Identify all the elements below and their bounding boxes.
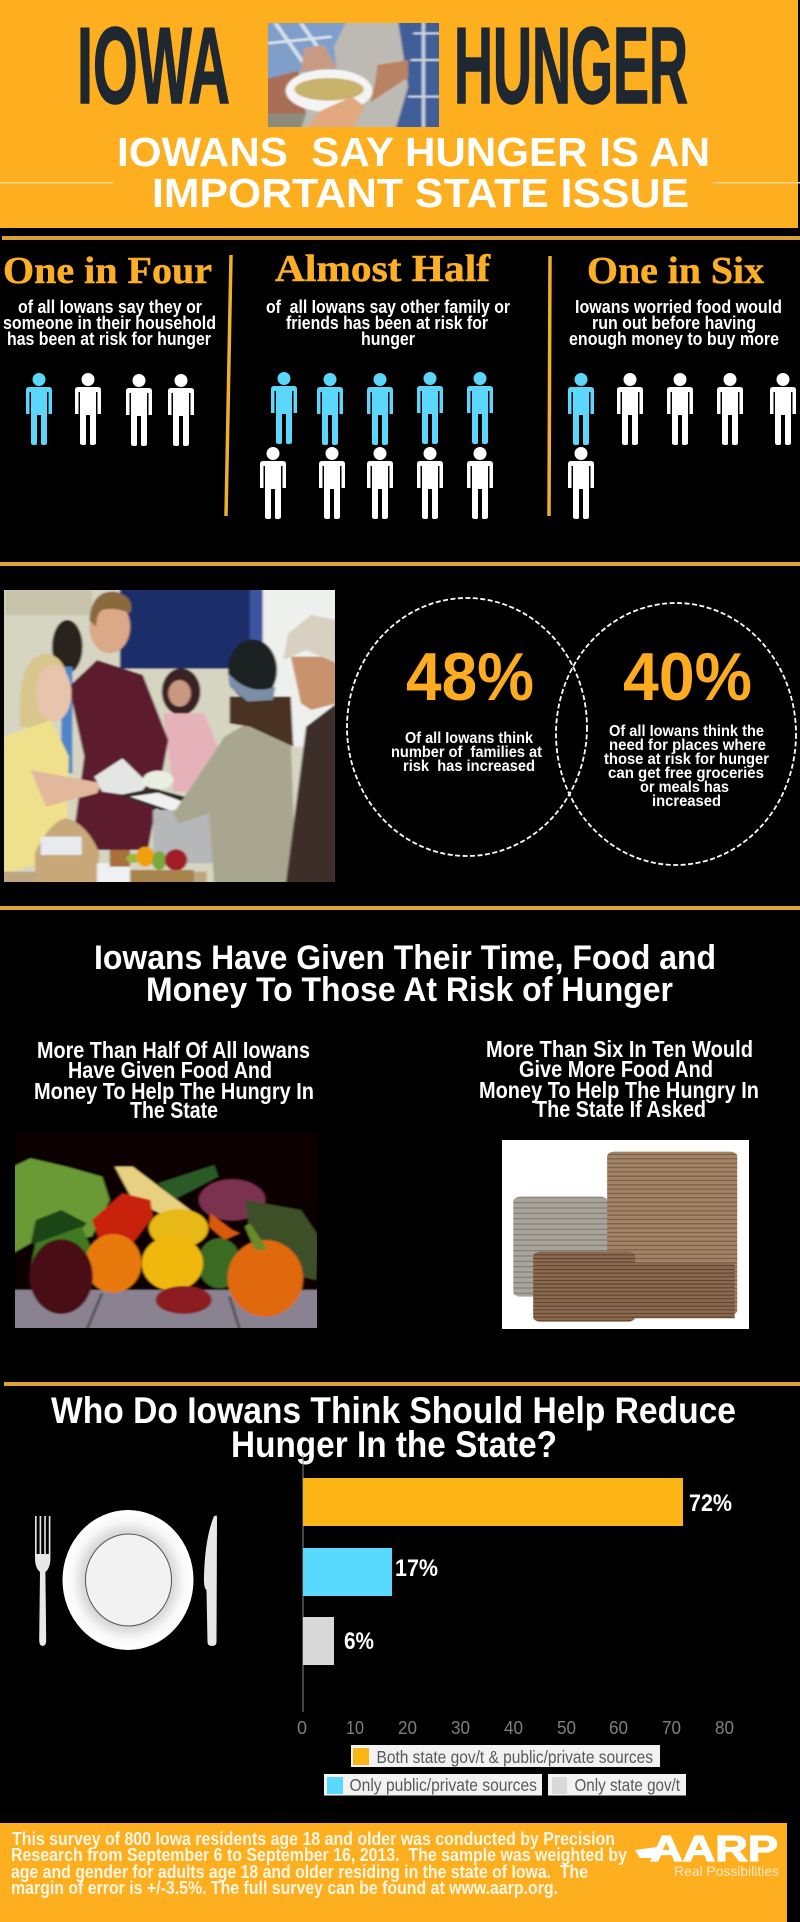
- text: one in six description: run out before having: [592, 313, 756, 333]
- panel: almost half: [260, 248, 510, 519]
- heading: Iowans have given: Money To Those At Risk of Hunger: [146, 971, 673, 1009]
- axis tick labels: 80: [715, 1718, 734, 1738]
- heading: One in Four: One in Four: [3, 250, 212, 292]
- text: 40 percent description: or meals has: [640, 779, 729, 796]
- text: almost half description: of all Iowans say other family or: [266, 297, 510, 317]
- value: 17%: 17%: [395, 1555, 438, 1582]
- text: survey note: age and gender for adults age 18 and older residing in the state of Iowa. The: [11, 1862, 588, 1882]
- text: one in six description: [569, 297, 782, 349]
- icon: plate with fork and knife: [35, 1510, 217, 1650]
- text: 48 percent description: number of families at: [391, 744, 542, 761]
- heading: One in Six: One in Six: [587, 250, 764, 292]
- divider: [226, 255, 231, 516]
- text: 48 percent description: Of all Iowans think: [405, 730, 533, 747]
- legend: state: Only state gov/t: [574, 1775, 680, 1795]
- icons: five of ten people highlighted: [260, 372, 493, 519]
- axis tick labels: 70: [662, 1718, 681, 1738]
- text: 40 percent description: increased: [652, 793, 721, 810]
- text: more than half: More Than Half Of All Iowans: [37, 1037, 310, 1063]
- text: more than six in ten: Give More Food And: [519, 1056, 713, 1082]
- text: more than six in ten: The State If Asked: [535, 1096, 706, 1122]
- logo: AARP: AARP: [650, 1828, 778, 1869]
- bar: public/private 17%: [303, 1548, 392, 1596]
- text: more than six in ten: More Than Six In Ten Would: [486, 1036, 753, 1062]
- photo: stacks of coins: [502, 1140, 749, 1329]
- text: 40 percent description: can get free groceries: [608, 765, 764, 782]
- icon: fork: [35, 1516, 50, 1646]
- text: one in four description: has been at risk for hunger: [7, 329, 211, 349]
- bar: state 6%: [303, 1617, 334, 1665]
- stat: 48%: 48%: [406, 639, 534, 715]
- text: 40 percent description: [604, 723, 769, 810]
- axis tick labels: 50: [557, 1718, 576, 1738]
- stat: 40%: 40%: [623, 639, 752, 715]
- photo: volunteers serving food: [0, 587, 342, 887]
- text: more than half: Have Given Food And: [68, 1057, 272, 1083]
- text: more than six in ten: [479, 1036, 759, 1122]
- legend: public/private: Only public/private sources: [350, 1775, 537, 1795]
- photo: bowl of soup handed over: [268, 23, 439, 127]
- value: 72%: 72%: [689, 1490, 732, 1517]
- text: 40 percent description: need for places where: [609, 737, 766, 754]
- axis tick labels: 40: [504, 1718, 523, 1738]
- heading: who should help: [51, 1390, 736, 1465]
- heading: Iowans have given: Iowans Have Given Their Time, Food and: [94, 939, 716, 977]
- text: 48 percent description: risk has increased: [403, 758, 535, 775]
- axis tick labels: 10: [346, 1718, 364, 1738]
- axis tick labels: 60: [609, 1718, 628, 1738]
- text: 40 percent description: Of all Iowans think the: [609, 723, 764, 740]
- heading: Almost Half: Almost Half: [275, 248, 491, 290]
- heading: who should help: Hunger In the State?: [231, 1424, 557, 1465]
- logo tagline: Real Possibilities: [674, 1863, 779, 1879]
- legend: both sources: Both state gov/t & public/private sources: [376, 1747, 653, 1767]
- icons: one of six people highlighted: [568, 373, 796, 519]
- axis tick labels: 0: [297, 1718, 307, 1738]
- text: almost half description: hunger: [361, 329, 415, 349]
- heading: Iowans have given: [94, 939, 716, 1009]
- divider: [549, 256, 550, 516]
- text: one in six description: enough money to buy more: [569, 329, 779, 349]
- logo: AARP: [635, 1828, 779, 1879]
- value: 6%: 6%: [344, 1628, 374, 1655]
- axis tick labels: [297, 1718, 734, 1738]
- text: one in four description: of all Iowans say they or: [18, 297, 202, 317]
- subtitle line 1: IOWANS SAY HUNGER IS AN: [117, 129, 710, 175]
- photo: vegetables and fruit: [10, 1131, 322, 1332]
- text: more than six in ten: Money To Help The Hungry In: [479, 1077, 759, 1103]
- panel: one in four: [3, 250, 216, 446]
- panel: footer: [0, 1823, 787, 1922]
- bar chart: who should help: [297, 1454, 734, 1738]
- text: 48 percent description: [391, 730, 542, 775]
- heading: who should help: Who Do Iowans Think Should Help Reduce: [51, 1390, 736, 1431]
- text: more than half: The State: [130, 1097, 218, 1123]
- text: one in four description: someone in their household: [3, 313, 216, 333]
- icon: knife: [204, 1515, 217, 1646]
- text: survey note: margin of error is +/-3.5%. The full survey can be found at www.aarp.org.: [11, 1878, 558, 1898]
- icons: one of four people highlighted: [26, 373, 194, 446]
- axis tick labels: 30: [451, 1718, 470, 1738]
- icon: plate: [62, 1510, 194, 1650]
- text: survey note: [11, 1829, 627, 1898]
- panel: 48 percent circle: [347, 598, 587, 856]
- text: more than half: [34, 1037, 314, 1123]
- text: 40 percent description: those at risk for hunger: [604, 751, 769, 768]
- text: survey note: This survey of 800 Iowa residents age 18 and older was conducted by Precision: [12, 1829, 615, 1849]
- panel: one in six: [568, 250, 796, 519]
- subtitle line 2: IMPORTANT STATE ISSUE: [152, 170, 689, 216]
- title: IOWA: IOWA: [77, 5, 230, 127]
- text: almost half description: [266, 297, 510, 349]
- text: one in four description: [3, 297, 216, 349]
- panel: 40 percent circle: [556, 603, 796, 865]
- axis tick labels: 20: [398, 1718, 417, 1738]
- panel: header banner: [0, 0, 800, 228]
- text: more than half: Money To Help The Hungry In: [34, 1078, 314, 1104]
- bar: both 72%: [303, 1478, 683, 1526]
- text: almost half description: friends has been at risk for: [286, 313, 488, 333]
- text: survey note: Research from September 6 to September 16, 2013. The sample was weighted by: [11, 1845, 627, 1865]
